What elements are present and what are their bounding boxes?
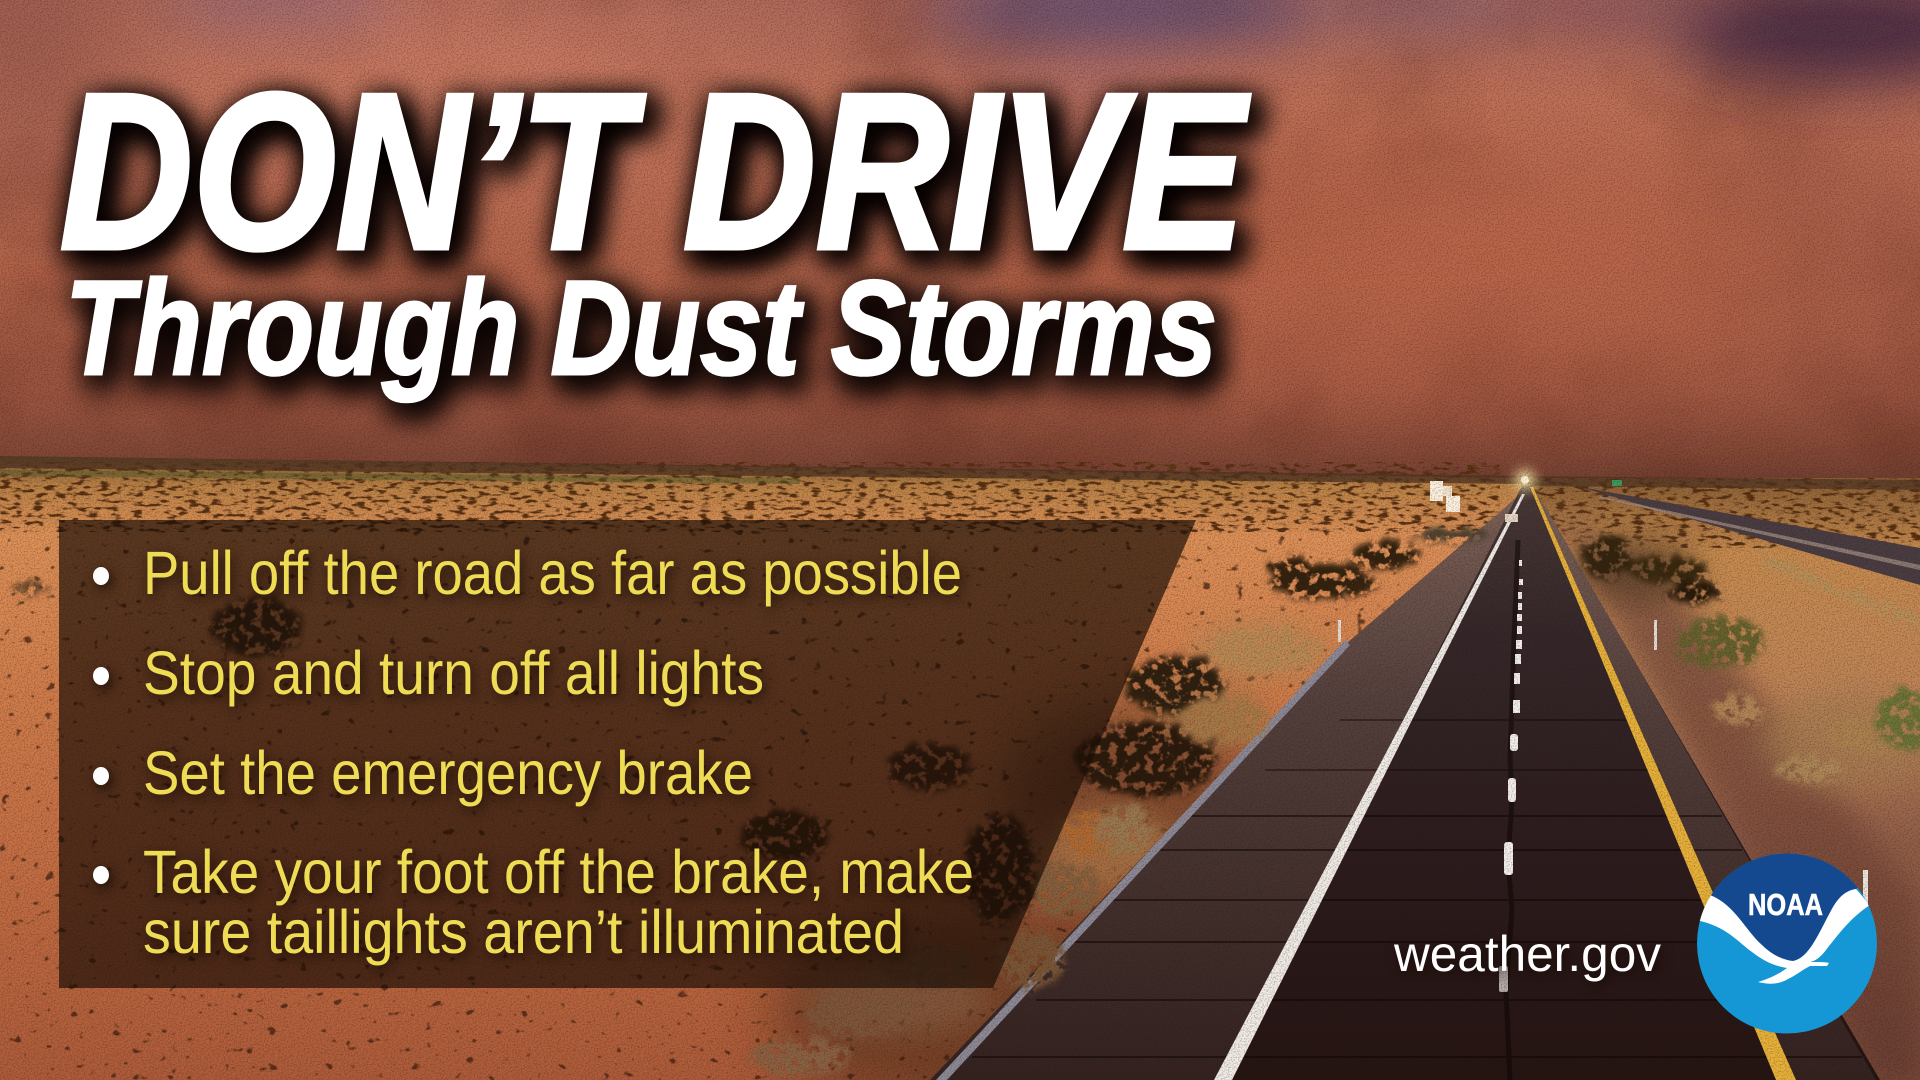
background: highway road bbox=[930, 486, 1880, 1080]
background: asphalt seams and cracks bbox=[972, 540, 1862, 1080]
website url: weather.gov bbox=[1393, 926, 1661, 982]
icon: NOAA logo bbox=[1697, 854, 1877, 1034]
bullet 4: Take your foot off the brake, make bbox=[143, 838, 974, 906]
background: yellow edge line bbox=[1530, 487, 1796, 1080]
title line: don't drive: DON’T DRIVE bbox=[60, 48, 1250, 296]
background: white edge line bbox=[1214, 494, 1525, 1080]
background: desert ground right of road bbox=[1525, 476, 1920, 1080]
background: centre dashes bbox=[1499, 560, 1523, 992]
bullet 4: sure taillights aren’t illuminated bbox=[143, 898, 904, 966]
background: distant lights and signs bbox=[1338, 470, 1868, 920]
title line: through dust storms: Through Dust Storms bbox=[65, 254, 1217, 403]
background: dust storm wall sky bbox=[0, 0, 1920, 490]
bullet 3: Set the emergency brake bbox=[143, 739, 753, 807]
bullet 1: Pull off the road as far as possible bbox=[143, 539, 962, 607]
background: desert ground left of road bbox=[0, 456, 1530, 1080]
bullet 2: Stop and turn off all lights bbox=[143, 639, 764, 707]
safety instructions list bbox=[93, 539, 974, 966]
background: guardrail bbox=[936, 640, 1350, 1080]
bullet 4 bbox=[93, 838, 974, 966]
title bbox=[60, 48, 1250, 403]
background: roadside bushes bbox=[14, 528, 1920, 1078]
icon: NOAA logo: NOAA bbox=[1748, 887, 1823, 922]
instructions panel backdrop bbox=[59, 520, 1196, 988]
